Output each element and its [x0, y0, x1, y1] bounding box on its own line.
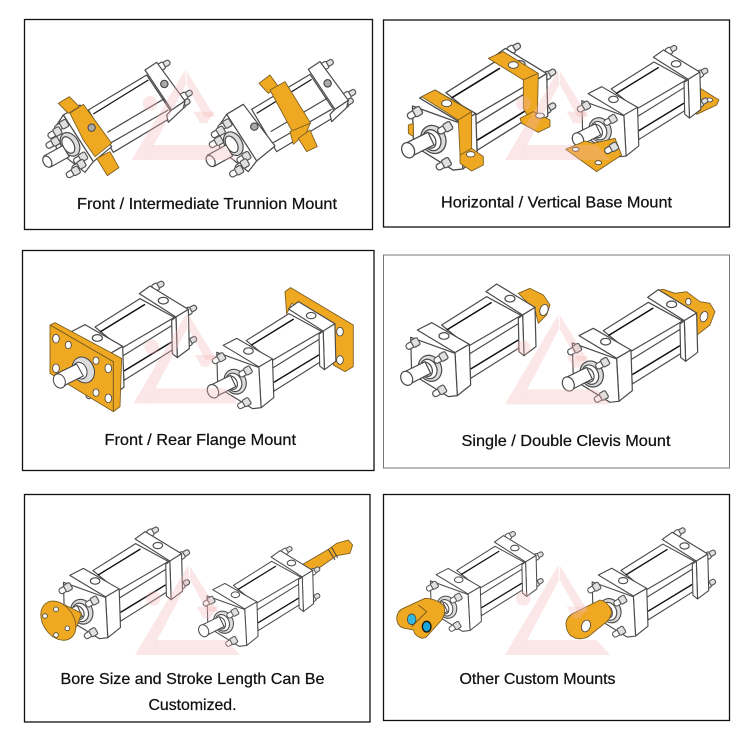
illustration: clevis mount cylinders: [398, 284, 715, 404]
panel: front / intermediate trunnion mount: [24, 20, 372, 230]
panel: other custom mounts: [384, 494, 730, 720]
panel: bore size and stroke customization: [24, 494, 370, 722]
illustration: custom rod end cylinders: [397, 526, 717, 655]
caption: Single / Double Clevis Mount: [462, 433, 671, 450]
illustration: flange mount cylinders: [50, 279, 353, 412]
illustration: base mount cylinders: [399, 41, 719, 172]
caption: Horizontal / Vertical Base Mount: [441, 194, 673, 212]
caption: second line: Customized.: [148, 697, 236, 714]
illustration: customized rod end cylinders: [34, 525, 353, 655]
panel: horizontal / vertical base mount: [384, 20, 730, 227]
caption: Front / Rear Flange Mount: [104, 432, 297, 449]
caption: Other Custom Mounts: [460, 671, 616, 688]
caption: first line: Bore Size and Stroke Length Can Be: [60, 671, 325, 688]
illustration: trunnion mount cylinders: [41, 58, 357, 179]
panel: single / double clevis mount: [384, 255, 730, 468]
caption: Front / Intermediate Trunnion Mount: [77, 196, 338, 213]
panel: front / rear flange mount: [22, 250, 374, 470]
